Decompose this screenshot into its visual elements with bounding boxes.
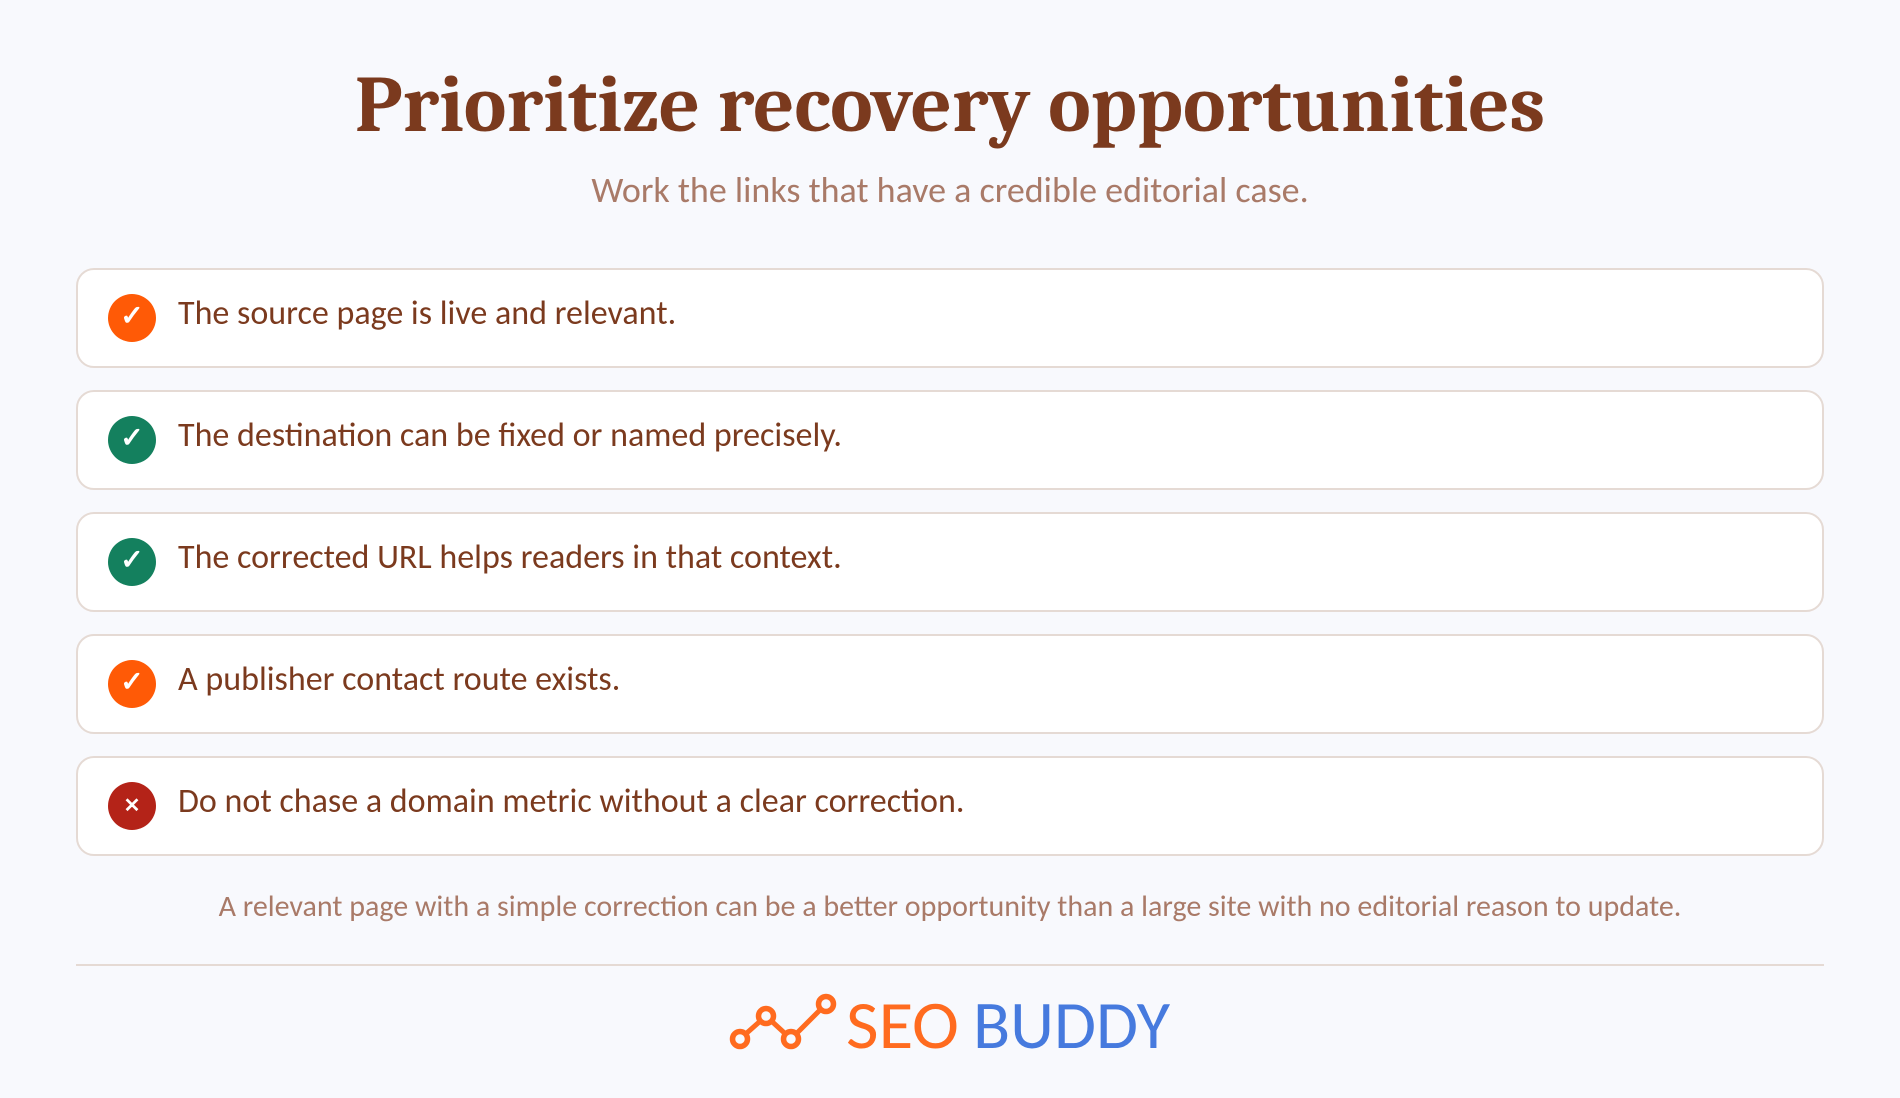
wordmark: SEO [846, 984, 959, 1067]
wordmark [846, 984, 1171, 1067]
icon: orange check: ✓ [120, 298, 144, 333]
text: source page: The source page is live and relevant. [178, 293, 676, 334]
card: corrected URL [76, 512, 1824, 612]
card: source page [76, 268, 1824, 368]
text: destination: The destination can be fixed or named precisely. [178, 415, 842, 456]
text: publisher contact: A publisher contact route exists. [178, 659, 620, 700]
card: publisher contact [76, 634, 1824, 734]
subtitle: Work the links that have a credible editorial case. [591, 168, 1309, 212]
icon: green check [108, 416, 156, 464]
icon: trend line [732, 996, 834, 1046]
title: Prioritize recovery opportunities [355, 60, 1545, 152]
icon: green check: ✓ [120, 542, 144, 577]
card: domain metric warning [76, 756, 1824, 856]
icon: orange check [108, 294, 156, 342]
card: destination [76, 390, 1824, 490]
wordmark: BUDDY [973, 984, 1171, 1067]
icon: orange check [108, 660, 156, 708]
footnote: A relevant page with a simple correction can be a better opportunity than a large site with no editorial reason to update. [219, 888, 1681, 925]
text: corrected URL: The corrected URL helps readers in that context. [178, 537, 842, 578]
icon: orange check: ✓ [120, 664, 144, 699]
text: domain metric warning: Do not chase a domain metric without a clear correction. [178, 781, 964, 822]
icon: green check [108, 538, 156, 586]
icon: red cross [108, 782, 156, 830]
logo: SEO Buddy [730, 984, 1171, 1067]
icon: red cross: ✕ [124, 794, 140, 818]
icon: green check: ✓ [120, 420, 144, 455]
